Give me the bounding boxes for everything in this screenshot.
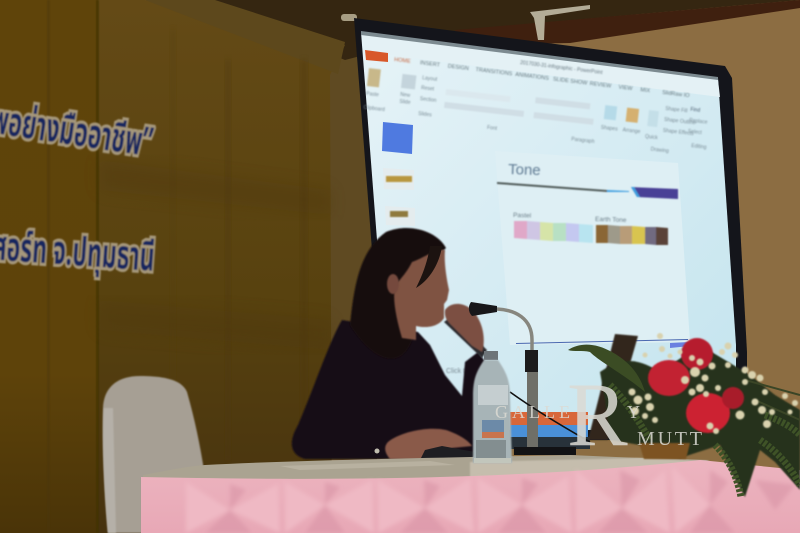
wispy right branches: [745, 380, 800, 420]
flower arrangement: [568, 333, 800, 497]
screen frame: [354, 18, 747, 440]
pastel swatches: [514, 221, 593, 243]
ribbon tabs: INSERT: [420, 60, 441, 69]
papers on table: [280, 461, 455, 470]
watermark: Y: [627, 402, 640, 422]
microphone stand: [469, 302, 590, 455]
ribbon groups: Shape Outline: [664, 117, 696, 126]
earth tone swatches: [596, 225, 668, 245]
mouse: [420, 446, 475, 461]
ribbon title: 2017030-31-infographic - PowerPoint: [520, 60, 603, 76]
tone rule: [497, 182, 678, 199]
thumbnail 2: [383, 168, 414, 190]
projection screen: [354, 18, 747, 449]
handheld microphone: [444, 316, 487, 358]
table skirt: [141, 460, 800, 533]
ribbon tabs: VIEW: [618, 85, 634, 92]
ribbon groups: Quick: [645, 134, 659, 141]
ribbon tabs: TRANSITIONS: [475, 67, 513, 78]
laptop: [588, 334, 638, 440]
ribbon groups: Font: [487, 125, 498, 132]
ribbon groups: New: [400, 92, 411, 99]
curtain rail bracket: [530, 5, 590, 40]
fringe strand: [416, 246, 442, 288]
gold curtain: [0, 0, 345, 533]
ribbon groups: Paste: [366, 91, 379, 98]
ribbon groups: Shape Effects: [662, 128, 694, 137]
hand with mic: [445, 304, 484, 352]
ribbon tabs: DESIGN: [447, 64, 469, 72]
ribbon groups: Shape Fill: [665, 106, 688, 114]
water bottle: [473, 351, 512, 463]
ribbon groups: Section: [419, 96, 437, 104]
ceiling: [200, 0, 800, 60]
ribbon groups: Clipboard: [363, 105, 385, 113]
ribbon groups: Reset: [421, 85, 435, 93]
tone slide heading: Tone: [508, 161, 541, 179]
ear: [387, 274, 399, 294]
beam: [455, 0, 800, 45]
watermark: R: [567, 364, 628, 465]
table top: [143, 455, 710, 479]
ribbon tabs: ANIMATIONS: [515, 72, 549, 82]
ribbon groups: Arrange: [622, 127, 641, 135]
upper left frond: [568, 345, 645, 392]
white chair: [103, 376, 204, 533]
ribbon groups: Drawing: [650, 147, 669, 155]
pleat rosettes: [186, 466, 795, 533]
rail stub: [341, 14, 357, 21]
watermark: MUTT: [637, 428, 702, 450]
file tab: [365, 50, 388, 62]
ribbon groups: Editing: [691, 143, 707, 151]
red carnations: [648, 338, 744, 433]
ribbon groups: Slide: [399, 99, 411, 106]
gypsophila: [628, 333, 798, 434]
pastel label: Pastel: [513, 212, 532, 220]
watermark: GALLE: [495, 402, 570, 422]
face: [394, 250, 449, 340]
slide thumbnail: [382, 122, 413, 154]
watermark: [495, 364, 702, 465]
slide page: [495, 151, 690, 345]
ribbon tabs: HOME: [394, 57, 411, 65]
hand on mouse: [385, 429, 472, 460]
foliage: [600, 345, 800, 497]
ribbon tabs: REVIEW: [589, 81, 612, 90]
lower slide rule: [516, 339, 688, 344]
click note: Click to: [446, 368, 469, 375]
thumbnail 3: [385, 206, 415, 226]
ribbon tabs: SLIDE SHOW: [553, 77, 588, 87]
ribbon groups: [362, 68, 711, 159]
presenter: [292, 228, 490, 461]
ribbon tabs: MIX: [640, 87, 651, 94]
ribbon groups: Replace: [689, 118, 708, 126]
fern fronds: [610, 385, 800, 497]
status bars at base of screen: [510, 412, 588, 425]
ribbon tabs: [394, 57, 690, 99]
ribbon band: [362, 34, 720, 97]
ribbon groups: Paragraph: [571, 136, 595, 145]
ribbon tabs: SlidRaw IO: [662, 90, 690, 99]
ribbon groups: Slides: [418, 111, 432, 119]
ribbon groups: Shapes: [600, 125, 618, 133]
jacket: [292, 320, 490, 459]
ribbon groups: Layout: [422, 75, 438, 83]
ribbon groups: Select: [688, 129, 703, 136]
pot: [639, 443, 690, 459]
screen surface: [361, 32, 736, 430]
earth tone label: Earth Tone: [595, 216, 627, 224]
ribbon groups: Find: [690, 107, 701, 114]
hair: [350, 228, 446, 359]
cuff button: [374, 448, 380, 454]
